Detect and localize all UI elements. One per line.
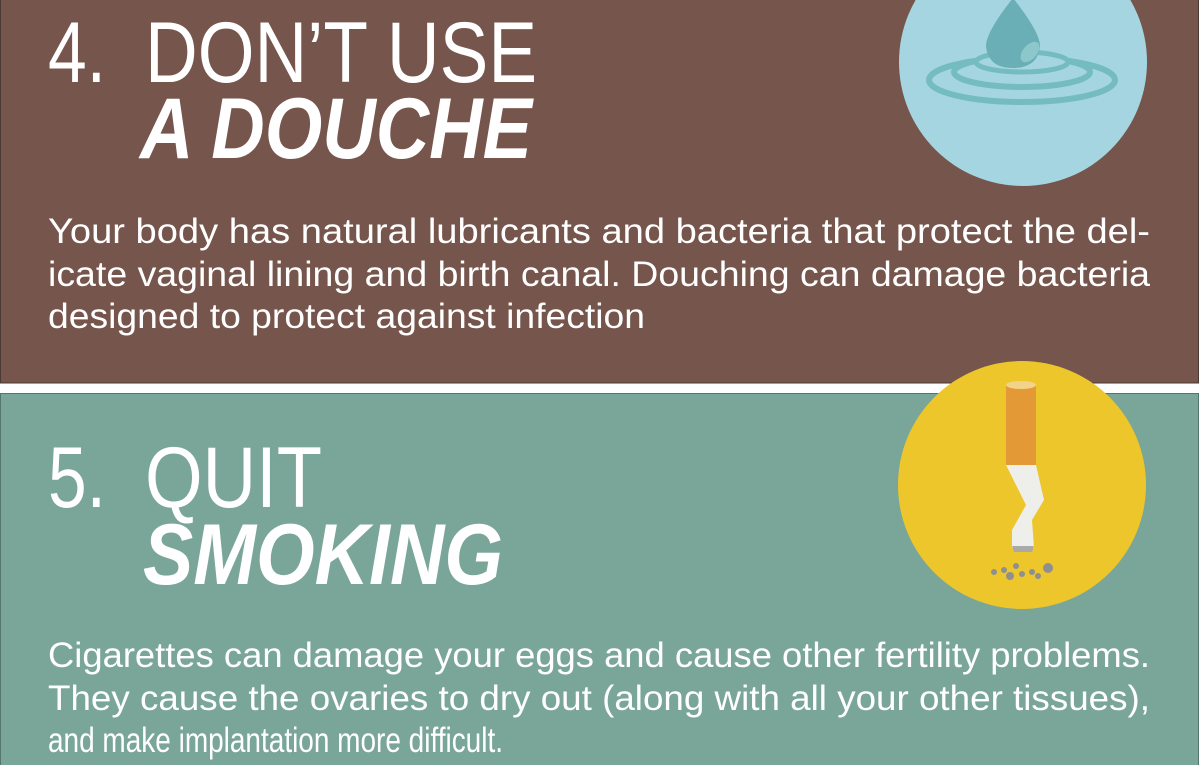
body text: smoking: Cigarettes can damage your eggs and cause other fertility problems. bbox=[48, 636, 1150, 675]
heading: 4. DON'T USE: 4. bbox=[48, 5, 106, 101]
heading: 4. DON'T USE: DON’T USE bbox=[145, 5, 537, 101]
icon: cigarette bbox=[898, 361, 1146, 609]
icon: water drop bbox=[899, 0, 1147, 186]
body text: douche bbox=[48, 212, 1151, 336]
heading: SMOKING: SMOKING bbox=[143, 507, 503, 603]
panel: douche bbox=[0, 0, 1198, 383]
heading: 5. QUIT bbox=[48, 430, 322, 526]
heading: A DOUCHE: A DOUCHE bbox=[138, 81, 534, 177]
body text: smoking bbox=[48, 636, 1150, 760]
panel: smoking bbox=[0, 361, 1198, 765]
body text: douche: icate vaginal lining and birth canal. Douching can damage bacteria bbox=[48, 255, 1151, 294]
heading: 5. QUIT: QUIT bbox=[145, 430, 322, 526]
body text: smoking: and make implantation more difficult. bbox=[48, 721, 503, 760]
heading: 5. QUIT: 5. bbox=[48, 430, 106, 526]
body text: douche: Your body has natural lubricants and bacteria that protect the del- bbox=[48, 212, 1150, 251]
body text: smoking: They cause the ovaries to dry out (along with all your other tissues), bbox=[48, 679, 1150, 718]
body text: douche: designed to protect against infection bbox=[48, 297, 645, 336]
